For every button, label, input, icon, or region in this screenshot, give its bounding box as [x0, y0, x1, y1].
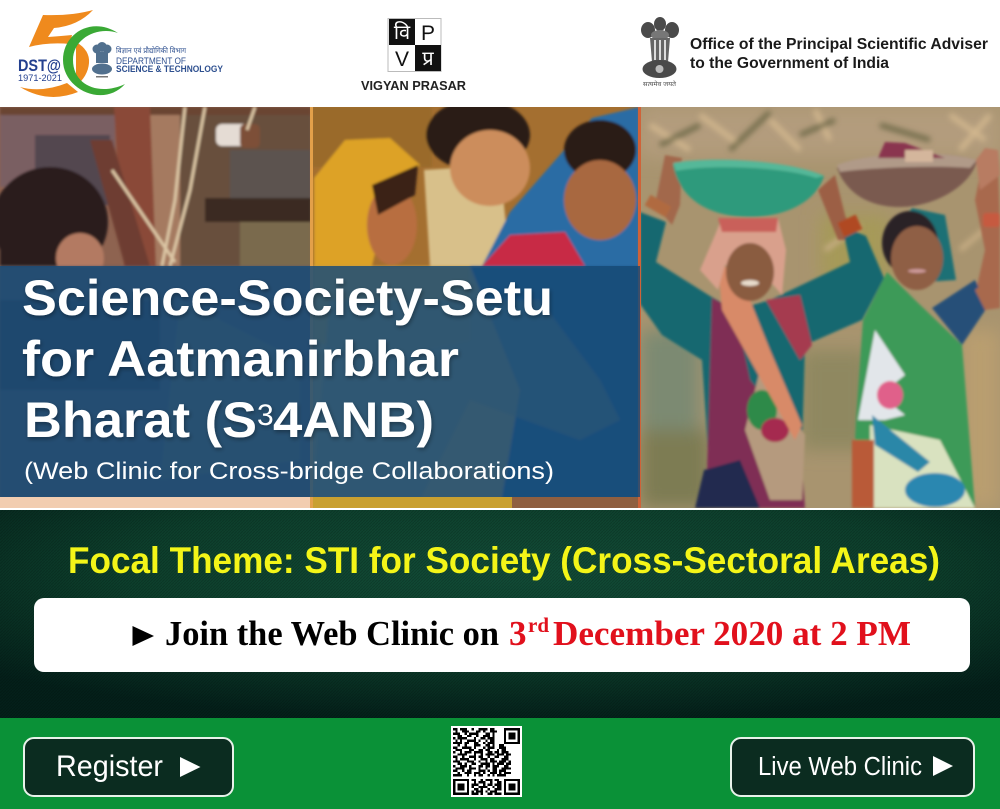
magenta drape [706, 298, 805, 508]
focal theme heading: Focal Theme: STI for Society (Cross-Sectoral Areas) [68, 540, 940, 581]
date text: December 2020 at 2 PM [553, 614, 911, 653]
years label: 1971-2021 [18, 73, 62, 83]
icon: orange numeral five [20, 10, 93, 97]
head wrap [700, 218, 786, 295]
logo: Office of the Principal Scientific Adviser [641, 17, 988, 88]
checker square logo: प्र [422, 48, 434, 70]
date text: rd [528, 613, 549, 637]
Vigyan Prasar wordmark: VIGYAN PRASAR [361, 78, 467, 93]
panel: action bar [0, 718, 1000, 809]
department name: DEPARTMENT OF [116, 56, 186, 67]
teal shirt [641, 210, 886, 444]
teal bowl [673, 161, 824, 217]
peach scarf strip [718, 265, 802, 440]
office name: Office of the Principal Scientific Adviser [690, 36, 988, 53]
navy blouse [932, 280, 988, 345]
office name second line: to the Government of India [690, 55, 889, 72]
header band [0, 0, 1000, 107]
icon: national emblem [641, 17, 679, 88]
title line one: Science-Society-Setu [22, 270, 553, 326]
button: register [24, 738, 233, 796]
checker square logo: P [421, 22, 435, 45]
photo: loom worker [0, 107, 311, 508]
register label: Register [56, 750, 163, 783]
foliage texture [649, 108, 992, 252]
photo separators [310, 107, 641, 508]
checker square logo [388, 18, 441, 72]
live web clinic label: Live Web Clinic [758, 753, 922, 781]
checker square logo: वि [394, 21, 411, 44]
title line three: 3 [257, 399, 274, 432]
icon: green crescent [63, 26, 125, 95]
join text: Join the Web Clinic on [165, 614, 499, 653]
subtitle: (Web Clinic for Cross-bridge Collaborations) [24, 458, 554, 485]
title [22, 270, 553, 448]
divider line [0, 508, 1000, 510]
date callout [34, 598, 970, 672]
title line three: Bharat (S [24, 392, 257, 448]
button: live web clinic [731, 738, 974, 796]
photo: women smiling [312, 99, 639, 508]
title line two: for Aatmanirbhar [22, 331, 459, 387]
arms [655, 155, 682, 225]
QR code [451, 726, 522, 797]
checker square logo: V [395, 48, 409, 71]
lower strip of photo [312, 497, 512, 508]
icon: small national emblem [92, 42, 112, 78]
second woman sari [852, 272, 975, 508]
blue translucent title panel [0, 266, 640, 497]
icon: play arrow [933, 756, 953, 776]
icon: national emblem: सत्यमेव जयते [643, 80, 677, 88]
logo: Vigyan Prasar [361, 18, 467, 93]
panel: focal theme [0, 510, 1000, 718]
department name hindi: विज्ञान एवं प्रौद्योगिकी विभाग [116, 46, 187, 55]
bracelet [983, 213, 1000, 227]
icon: play arrow [180, 757, 200, 777]
department name second line: SCIENCE & TECHNOLOGY [116, 64, 224, 75]
logo: DST 50 years [18, 10, 224, 97]
icon: arrow [132, 626, 154, 646]
date text: 3 [509, 614, 526, 653]
lower strip of photo [0, 497, 311, 508]
headscarf and face two [909, 206, 958, 284]
photo: women carrying bowls [640, 107, 1000, 508]
brown bowl [837, 154, 977, 207]
DST at label: DST@ [18, 56, 61, 75]
title line three: 4ANB) [273, 392, 434, 448]
face one [726, 243, 774, 301]
